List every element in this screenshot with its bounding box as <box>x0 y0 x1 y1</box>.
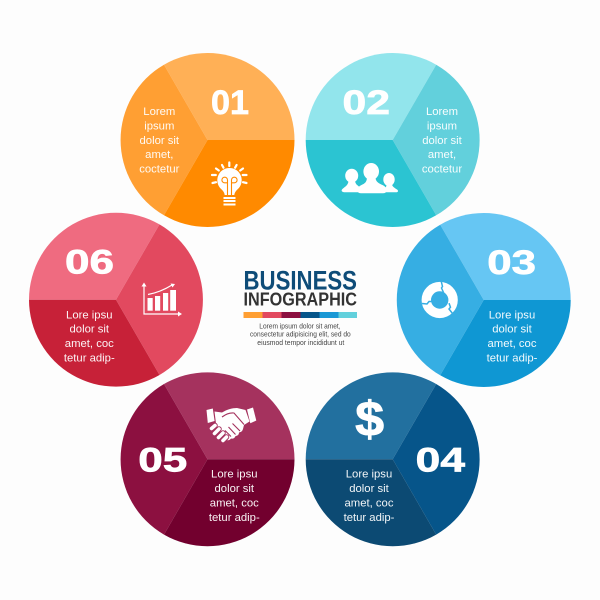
text block 06: amet, coc <box>65 338 114 350</box>
icon: light bulb <box>212 162 246 204</box>
text block 04: Lore ipsu <box>346 469 392 481</box>
number 01: 01 <box>211 84 249 122</box>
text block 03 <box>487 309 538 364</box>
color bar <box>244 312 357 318</box>
text block 04: amet, coc <box>345 498 394 510</box>
text block 05: amet, coc <box>210 498 259 510</box>
description text <box>250 321 351 347</box>
text block 03: Lore ipsu <box>489 309 535 321</box>
panel: step 05 <box>121 372 294 546</box>
text block 06: Lore ipsu <box>66 309 113 321</box>
heading: infographic: INFOGRAPHIC <box>244 290 357 310</box>
text block 01: dolor sit <box>140 135 180 147</box>
text block 02: Lorem <box>426 106 458 118</box>
number 04: 04 <box>416 442 465 480</box>
text block 05 <box>209 469 260 524</box>
text block 05: dolor sit <box>215 483 255 495</box>
description text: eiusmod tempor incididunt ut <box>257 338 344 347</box>
text block 01: Lorem <box>143 106 175 118</box>
panel: step 03 <box>397 213 571 387</box>
text block 05: Lore ipsu <box>211 469 258 481</box>
text block 02: dolor sit <box>422 135 463 147</box>
text block 01 <box>139 106 180 176</box>
number 05: 05 <box>138 442 187 480</box>
number 03: 03 <box>487 244 536 282</box>
panel: step 02 <box>306 53 480 227</box>
text block 02: ipsum <box>427 120 457 132</box>
description text: consectetur adipisicing elit, sed do <box>250 329 351 338</box>
text block 03: amet, coc <box>488 338 537 350</box>
text block 04 <box>344 469 395 524</box>
text block 01: amet, <box>145 149 173 161</box>
number 02: 02 <box>342 84 390 122</box>
text block 02 <box>422 106 463 176</box>
text block 04: tetur adip- <box>344 512 395 524</box>
icon: cycle arrows <box>422 280 453 314</box>
text block 04: dolor sit <box>349 483 390 495</box>
panel: step 06 <box>29 213 203 387</box>
heading: business: BUSINESS <box>244 266 357 296</box>
icon: dollar: $ <box>355 393 384 447</box>
text block 05: tetur adip- <box>209 512 260 524</box>
panel: step 04 <box>306 372 480 546</box>
center title block <box>244 266 357 347</box>
icon: people <box>342 163 398 193</box>
text block 06 <box>64 309 115 364</box>
text block 06: dolor sit <box>70 324 110 336</box>
text block 02: amet, <box>428 149 456 161</box>
icon: bar chart <box>142 282 182 316</box>
panel: step 01 <box>121 53 294 227</box>
number 06: 06 <box>65 243 114 281</box>
text block 06: tetur adip- <box>64 352 115 364</box>
icon: handshake <box>206 408 256 440</box>
text block 01: coctetur <box>139 164 180 176</box>
description text: Lorem ipsum dolor sit amet, <box>259 321 341 330</box>
text block 03: dolor sit <box>492 324 533 336</box>
text block 03: tetur adip- <box>487 352 538 364</box>
text block 01: ipsum <box>144 120 174 132</box>
text block 02: coctetur <box>422 164 462 176</box>
